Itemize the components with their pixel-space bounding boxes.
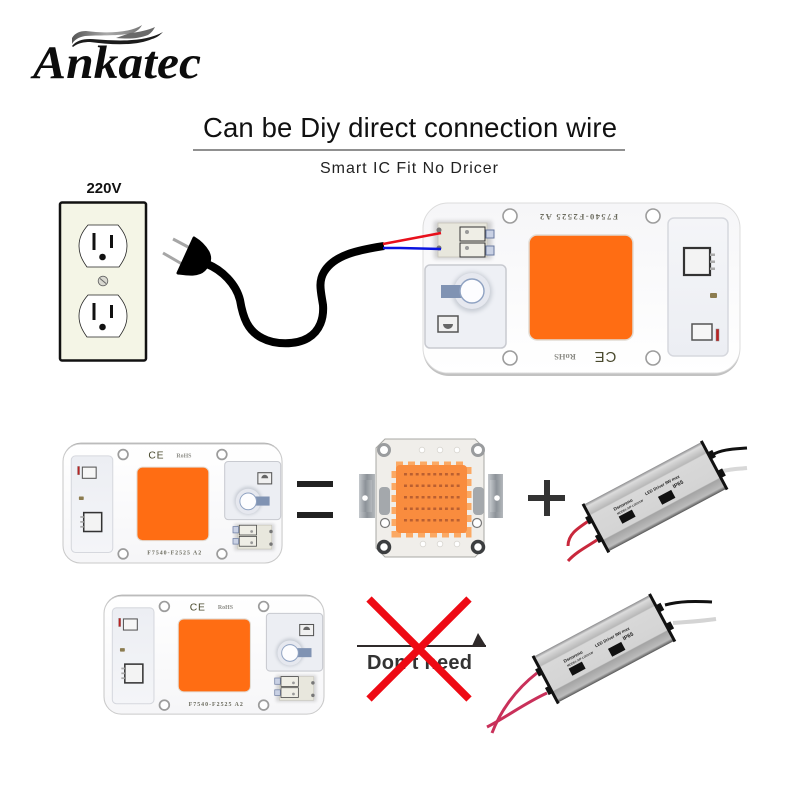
CE mark: CE bbox=[148, 451, 164, 462]
terminal slots bbox=[379, 487, 484, 515]
driver with wires (bottom) bbox=[487, 591, 716, 733]
logo: Ankatec bbox=[30, 25, 201, 89]
LED board: don't need row bbox=[104, 595, 324, 714]
label: Don't need bbox=[367, 652, 472, 674]
part number: F7540-F2525 A2 bbox=[147, 551, 201, 557]
right component panel bbox=[266, 613, 323, 671]
orange phosphor crown bbox=[396, 466, 467, 533]
COB LED chip bbox=[359, 439, 503, 557]
driver housing: LED Driver 9W max bbox=[594, 625, 631, 648]
line with triangle marker bbox=[357, 633, 486, 647]
left component panel bbox=[71, 456, 113, 552]
LED board: equals row bbox=[63, 443, 282, 563]
wire terminal connector bbox=[275, 675, 316, 702]
mounting holes bbox=[118, 450, 227, 559]
driver housing: MODEL:DP-LD0X1W bbox=[616, 498, 644, 516]
output wires bbox=[568, 448, 747, 561]
equals sign bbox=[297, 481, 333, 518]
main LED board (rotated) bbox=[423, 203, 740, 376]
CE mark: CE bbox=[594, 348, 616, 365]
RoHS mark: RoHS bbox=[176, 453, 192, 459]
part number: F7540-F2525 A2 bbox=[189, 702, 243, 708]
orange LED chip bbox=[137, 467, 209, 541]
clip holes bbox=[362, 495, 500, 501]
voltage label: 220V bbox=[86, 180, 122, 197]
left component panel bbox=[112, 608, 154, 704]
bottom corner holes bbox=[378, 542, 484, 552]
plug head bbox=[178, 238, 210, 274]
driver housing: MODEL:DP-LD0X1W bbox=[566, 650, 594, 668]
right component panel bbox=[425, 265, 506, 348]
lower receptacle bbox=[79, 295, 127, 337]
mounting holes bbox=[160, 602, 268, 710]
small frame dots bbox=[419, 447, 460, 547]
driver housing bbox=[579, 438, 732, 555]
output wires bbox=[487, 601, 716, 733]
mounting holes bbox=[503, 209, 660, 365]
logo wordmark: Ankatec bbox=[30, 37, 201, 89]
icon: wall outlet bbox=[60, 202, 146, 360]
left component panel bbox=[668, 218, 728, 356]
driver housing bbox=[529, 591, 680, 706]
RoHS mark: RoHS bbox=[554, 352, 576, 362]
red X bbox=[369, 599, 469, 699]
cord bbox=[207, 246, 384, 343]
metal base bbox=[376, 439, 484, 557]
driver housing: LED Driver 9W max bbox=[644, 473, 681, 496]
subtitle: Smart IC Fit No Dricer bbox=[320, 160, 499, 177]
connection wires bbox=[383, 233, 441, 249]
title: Can be Diy direct connection wire bbox=[203, 112, 617, 143]
plus sign bbox=[528, 480, 565, 516]
outlet screw bbox=[98, 276, 108, 286]
middle holes bbox=[380, 518, 482, 528]
RoHS mark: RoHS bbox=[218, 605, 234, 611]
upper receptacle bbox=[79, 225, 127, 267]
CE mark: CE bbox=[190, 603, 206, 614]
right component panel bbox=[225, 462, 281, 520]
orange LED chip bbox=[178, 619, 250, 692]
driver housing: IP65 bbox=[622, 632, 635, 642]
title underline bbox=[193, 150, 625, 151]
crossed-out "Don't need" sign bbox=[357, 599, 486, 699]
top corner holes bbox=[378, 444, 484, 456]
wire terminal connector bbox=[434, 221, 494, 259]
driver housing: Dsnoreno bbox=[563, 649, 584, 664]
orange LED chip bbox=[529, 235, 633, 340]
plug prongs bbox=[163, 239, 190, 264]
driver with wires (top) bbox=[568, 438, 747, 561]
icon: plug and black cord bbox=[163, 238, 384, 343]
logo swoosh bbox=[72, 25, 163, 47]
driver housing: Dsnoreno bbox=[613, 497, 634, 512]
part number: F7540-F2525 A2 bbox=[540, 212, 618, 222]
side clips bbox=[359, 474, 503, 518]
LED die rows bbox=[404, 473, 460, 524]
wire terminal connector bbox=[233, 524, 274, 550]
driver housing: IP65 bbox=[672, 480, 685, 490]
